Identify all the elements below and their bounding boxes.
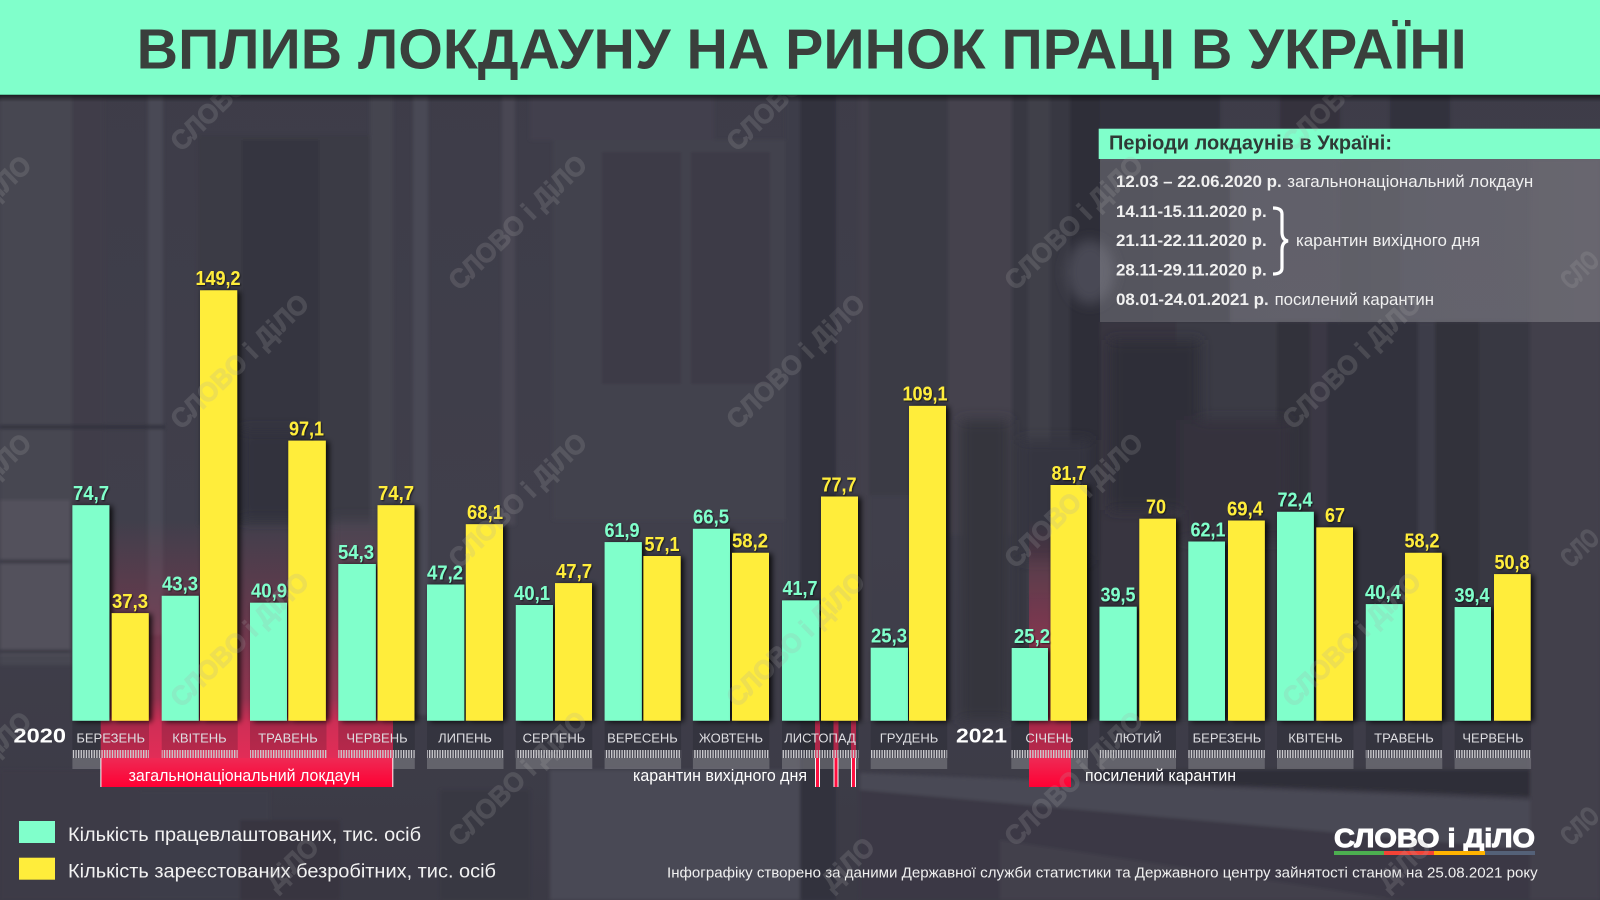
month: січень 2021: 25,2	[1014, 625, 1050, 648]
month: листопад 2020: 77,7	[822, 473, 856, 496]
watermarks: ДіЛО	[259, 832, 325, 896]
month: квітень 2021: 72,4	[1278, 489, 1313, 512]
panel: lockdown periods: загальнонаціональний локдаун	[1287, 173, 1533, 191]
month: липень 2020: 47,2	[427, 561, 463, 584]
month: листопад 2020	[782, 473, 858, 746]
lockdown bar: national	[101, 758, 393, 787]
watermarks: СЛОВО і ДіЛО	[721, 288, 871, 435]
month: січень 2021: 81,7	[1052, 462, 1086, 485]
month: липень 2020: 68,1	[467, 501, 503, 524]
panel: lockdown periods: 12.03 – 22.06.2020 р.	[1116, 173, 1282, 191]
watermarks: СЛОВО і ДіЛО	[1277, 566, 1427, 713]
month: лютий 2021: 39,5	[1100, 584, 1136, 606]
watermarks: СЛОВО і ДіЛО	[999, 705, 1149, 852]
month: березень 2021: 62,1	[1190, 518, 1226, 541]
month: березень 2021: БЕРЕЗЕНЬ	[1193, 731, 1261, 746]
header band	[0, 0, 1600, 102]
month: квітень 2021	[1277, 489, 1353, 746]
month: жовтень 2020: ЖОВТЕНЬ	[699, 731, 763, 746]
month: травень 2020	[250, 417, 326, 746]
month: червень 2020: ЧЕРВЕНЬ	[346, 731, 408, 746]
lockdown stripes: weekend quarantine: карантин вихідного дня	[633, 766, 807, 785]
month: жовтень 2020	[693, 506, 769, 746]
red glow: national lockdown	[101, 520, 393, 758]
watermarks: СЛОВО і ДіЛО	[443, 705, 593, 852]
month: червень 2020: 54,3	[338, 541, 374, 564]
month: серпень 2020: СЕРПЕНЬ	[523, 731, 585, 746]
watermarks: СЛОВО і ДіЛО	[999, 149, 1149, 296]
panel: lockdown periods: 21.11-22.11.2020 р.	[1116, 232, 1267, 250]
year label 2020: 2020	[14, 726, 66, 748]
month: лютий 2021: 70	[1146, 496, 1166, 518]
panel: lockdown periods: 08.01-24.01.2021 р.	[1116, 291, 1269, 309]
year label 2021: 2021	[956, 726, 1007, 748]
panel: lockdown periods: карантин вихідного дня	[1296, 232, 1480, 250]
month: березень 2020: 74,7	[73, 482, 109, 505]
month: травень 2020: 97,1	[289, 417, 324, 440]
month: травень 2020: ТРАВЕНЬ	[258, 731, 318, 746]
month: березень 2020: БЕРЕЗЕНЬ	[76, 731, 145, 746]
bar chart	[72, 267, 1531, 746]
month: березень 2020	[72, 482, 149, 746]
month: червень 2020	[338, 482, 414, 746]
lockdown bar: strengthened quarantine	[1029, 758, 1236, 787]
source note: Інфографіку створено за даними Державної служби статистики та Державного центру зайнятості станом на 25.08.2021 року	[667, 866, 1538, 882]
month: липень 2020: ЛИПЕНЬ	[438, 731, 492, 746]
watermarks: СЛОВО і ДіЛО	[1277, 288, 1427, 435]
month: лютий 2021: ЛЮТИЙ	[1114, 731, 1162, 746]
month: квітень 2021: 67	[1325, 504, 1345, 527]
legend: Кількість зареєстованих безробітних, тис. осіб	[68, 861, 496, 883]
panel: lockdown periods: Періоди локдаунів в Україні:	[1109, 132, 1392, 154]
month: червень 2021: 50,8	[1494, 551, 1530, 574]
month bands	[72, 721, 1531, 769]
month: жовтень 2020: 66,5	[693, 506, 729, 529]
watermarks: СЛОВО і ДіЛО	[165, 566, 315, 713]
month: вересень 2020: 61,9	[604, 519, 640, 542]
month: вересень 2020: 57,1	[644, 533, 680, 556]
watermarks: СЛОВО і ДіЛО	[165, 288, 315, 435]
month: травень 2021: ТРАВЕНЬ	[1374, 731, 1434, 746]
legend: Кількість працевлаштованих, тис. осіб	[68, 824, 421, 846]
red stripes: weekend quarantine	[815, 721, 856, 758]
month: березень 2021	[1188, 497, 1265, 746]
legend	[19, 821, 496, 883]
logo: СЛОВО і ДіЛО	[1334, 823, 1535, 853]
month: травень 2021	[1365, 530, 1442, 746]
month: червень 2021: 39,4	[1454, 584, 1490, 607]
month: червень 2021	[1454, 551, 1531, 746]
watermarks: СЛОВО і ДіЛО	[1277, 10, 1427, 157]
watermarks: ДіЛО	[815, 832, 881, 896]
panel: lockdown periods	[1099, 129, 1600, 322]
month: вересень 2020	[604, 519, 681, 746]
month: травень 2020: 40,9	[251, 580, 287, 602]
panel: lockdown periods: посилений карантин	[1275, 291, 1434, 309]
watermarks: СЛОВО і ДіЛО	[721, 566, 871, 713]
watermarks: СЛОВО і ДіЛО	[721, 10, 871, 157]
month: лютий 2021	[1100, 496, 1176, 746]
month: січень 2021	[1012, 462, 1087, 746]
month: липень 2020	[427, 501, 503, 746]
month: січень 2021: СІЧЕНЬ	[1025, 731, 1074, 746]
month: грудень 2020: 109,1	[902, 383, 948, 406]
watermarks: СЛОВО і ДіЛО	[443, 427, 593, 574]
watermarks: СЛОВО і ДіЛО	[999, 427, 1149, 574]
month: жовтень 2020: 58,2	[732, 530, 768, 553]
watermarks: ДіЛО	[1371, 832, 1437, 896]
lockdown bar: national: загальнонаціональний локдаун	[129, 766, 360, 785]
title: ВПЛИВ ЛОКДАУНУ НА РИНОК ПРАЦІ В УКРАЇНІ	[137, 18, 1467, 82]
lockdown bar: strengthened quarantine: посилений карантин	[1085, 766, 1236, 785]
month: грудень 2020: ГРУДЕНЬ	[880, 731, 938, 746]
month: серпень 2020: 47,7	[556, 560, 592, 583]
month: грудень 2020: 25,3	[871, 624, 907, 648]
month: квітень 2020: 43,3	[162, 573, 198, 596]
month: травень 2021: 58,2	[1404, 530, 1440, 553]
panel: lockdown periods: 14.11-15.11.2020 р.	[1116, 203, 1267, 221]
month: грудень 2020	[871, 383, 948, 746]
watermarks: СЛОВО і ДіЛО	[443, 149, 593, 296]
month: серпень 2020: 40,1	[514, 582, 550, 605]
month: червень 2021: ЧЕРВЕНЬ	[1462, 731, 1524, 746]
month: квітень 2020: КВІТЕНЬ	[172, 731, 227, 746]
watermarks: СЛОВО і ДіЛО	[165, 10, 315, 157]
month: березень 2021: 69,4	[1227, 497, 1264, 520]
month: березень 2020: 37,3	[112, 590, 148, 613]
red glow: strengthened quarantine	[1029, 520, 1071, 758]
month: квітень 2020: 149,2	[196, 267, 240, 290]
month: серпень 2020	[514, 560, 592, 746]
month: травень 2021: 40,4	[1365, 581, 1402, 604]
month: червень 2020: 74,7	[378, 482, 414, 505]
month: квітень 2021: КВІТЕНЬ	[1288, 731, 1343, 746]
month: вересень 2020: ВЕРЕСЕНЬ	[607, 731, 678, 746]
month: квітень 2020	[162, 267, 240, 746]
panel: lockdown periods: 28.11-29.11.2020 р.	[1116, 262, 1267, 280]
month: листопад 2020: ЛИСТОПАД	[784, 731, 856, 746]
month: листопад 2020: 41,7	[782, 577, 818, 600]
lockdown stripes: weekend quarantine	[633, 758, 856, 787]
